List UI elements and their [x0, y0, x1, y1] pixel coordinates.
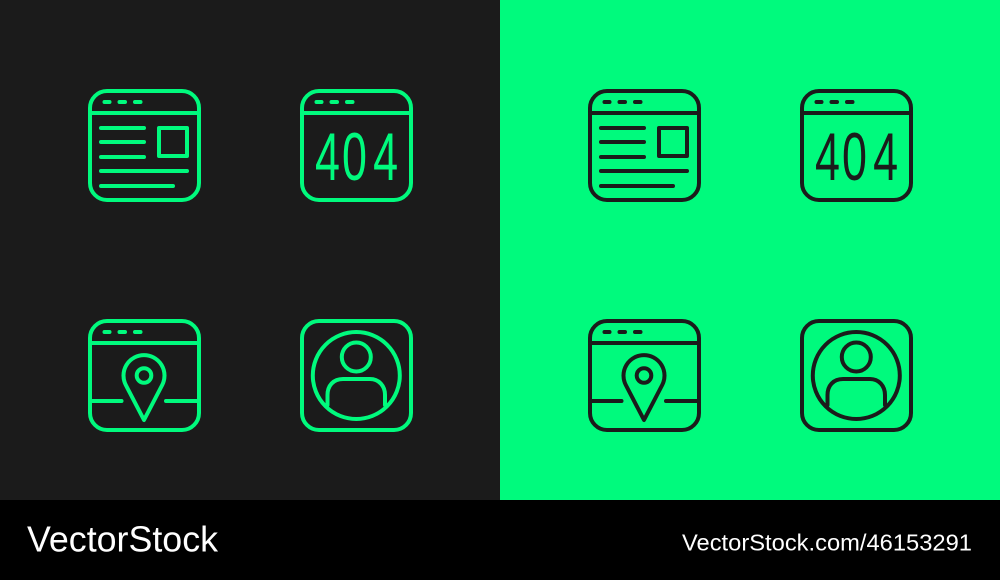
icon: location pin browser window, green on dark: [90, 321, 199, 430]
icon: location pin browser window, dark on green: [590, 321, 699, 430]
icon: user profile square, dark on green: [802, 321, 911, 430]
404 label: 404: [315, 120, 398, 195]
icon: article browser window, green on dark: [90, 91, 199, 200]
wordmark: VectorStock: VectorStock: [27, 518, 219, 560]
image reference: VectorStock.com/46153291: VectorStock.com/46153291: [682, 530, 972, 556]
panel: dark background: [0, 0, 500, 500]
icon: user profile square, green on dark: [302, 321, 411, 430]
404 label: 404: [815, 120, 898, 195]
icon: 404 browser window, dark on green: [802, 91, 911, 200]
panel: green background: [500, 0, 1000, 500]
footer bar: [0, 500, 1000, 580]
icon: 404 browser window, green on dark: [302, 91, 411, 200]
icon: article browser window, dark on green: [590, 91, 699, 200]
